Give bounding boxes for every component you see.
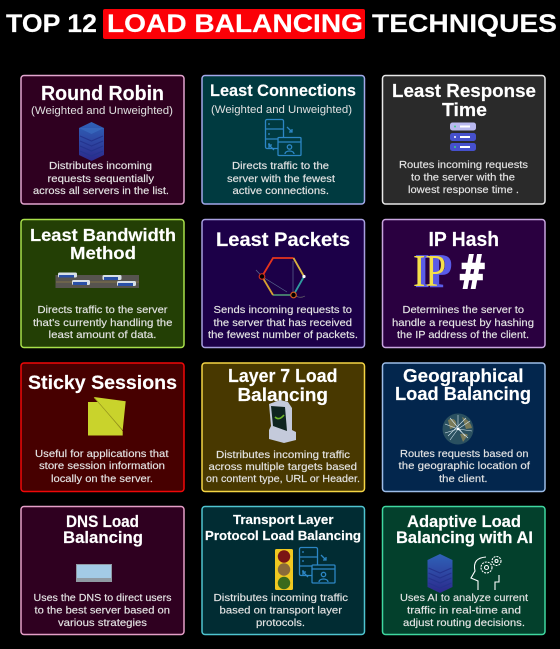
icon: hash symbol: #	[458, 245, 486, 299]
description	[208, 304, 358, 341]
heading: Geographical Load Balancing	[395, 365, 531, 404]
heading: Least Response Time	[392, 80, 536, 120]
icon: server stack	[450, 122, 476, 151]
heading: Least Response Time: Time	[442, 99, 487, 120]
description	[392, 304, 534, 341]
panel: DNS Load Balancing	[21, 506, 184, 634]
heading: Adaptive Load Balancing with AI: Adaptive Load	[407, 513, 521, 531]
heading: Geographical Load Balancing: Geographical	[403, 365, 524, 386]
description: to the best server based on	[34, 604, 170, 616]
description	[34, 592, 172, 629]
title: TECHNIQUES	[372, 10, 557, 38]
heading: Layer 7 Load Balancing: Layer 7 Load	[228, 365, 338, 386]
description: Determines the server to	[402, 304, 524, 316]
description: the IP address of the client.	[397, 329, 529, 341]
description: handle a request by hashing	[392, 317, 534, 329]
description: Routes incoming requests	[399, 159, 528, 171]
icon: server and user window	[300, 548, 335, 583]
heading: Transport Layer Protocol Load Balancing: Transport Layer	[233, 512, 334, 527]
subtitle: (Weighted and Unweighted)	[31, 105, 173, 117]
description: the client.	[439, 473, 488, 485]
heading: Least Bandwidth Method: Method	[70, 243, 136, 263]
description	[33, 160, 169, 197]
panel: Least Connections	[202, 76, 364, 204]
heading: IP Hash: IP Hash	[428, 229, 499, 251]
description: Distributes incoming traffic	[214, 592, 348, 604]
description	[399, 159, 528, 196]
heading: Transport Layer Protocol Load Balancing: Protocol Load Balancing	[205, 528, 361, 543]
title: TOP 12	[6, 10, 97, 38]
description: the geographic location of	[398, 460, 530, 472]
description: the server that has received	[214, 317, 352, 329]
description: least amount of data.	[48, 329, 156, 341]
description: across multiple targets based	[208, 461, 357, 473]
icon: IP letters: IP	[415, 245, 452, 298]
heading: DNS Load Balancing	[63, 513, 143, 547]
description	[35, 448, 169, 485]
description: various strategies	[58, 617, 147, 629]
description: server with the fewest	[227, 173, 335, 185]
panel: Sticky Sessions	[21, 363, 184, 492]
title	[6, 9, 557, 39]
description: the fewest number of packets.	[208, 329, 358, 341]
description: locally on the server.	[51, 473, 153, 485]
description: Distributes incoming traffic	[216, 449, 350, 461]
panel: Round Robin	[21, 76, 184, 204]
heading: Geographical Load Balancing: Load Balancing	[395, 383, 531, 404]
description: Directs traffic to the server	[38, 304, 168, 316]
description: on content type, URL or Header.	[206, 473, 360, 485]
icon: AI head with gears	[471, 556, 501, 590]
panel: Least Response Time	[382, 76, 545, 204]
icon: sticky notes	[88, 397, 126, 436]
description: Sends incoming requests to	[214, 304, 352, 316]
description	[398, 448, 530, 485]
panel: Least Bandwidth Method	[21, 220, 184, 348]
description	[214, 592, 348, 629]
icon: server tower	[79, 122, 104, 161]
icon: traffic light	[275, 549, 293, 590]
panel: Geographical Load Balancing	[382, 363, 545, 492]
icon: DNS device	[76, 564, 112, 582]
description	[400, 592, 528, 629]
description: Directs traffic to the	[232, 160, 329, 172]
heading: Least Bandwidth Method: Least Bandwidth	[30, 225, 176, 245]
description: Uses AI to analyze current	[400, 592, 528, 604]
description: Distributes incoming	[49, 160, 152, 172]
heading: Least Response Time: Least Response	[392, 80, 536, 101]
description: to the server with the	[411, 172, 515, 184]
icon: hexagon network	[256, 258, 306, 298]
description: requests sequentially	[48, 173, 155, 185]
panel: Transport Layer Protocol Load Balancing	[202, 506, 364, 634]
icon: server and user window	[266, 120, 301, 156]
heading: Least Bandwidth Method	[30, 225, 176, 263]
description: that's currently handling the	[33, 317, 173, 329]
description: adjust routing decisions.	[403, 617, 525, 629]
icon: computer terminal	[269, 400, 296, 443]
heading: Layer 7 Load Balancing	[228, 365, 338, 405]
heading: Least Connections: Least Connections	[210, 82, 356, 100]
panel: Least Packets	[202, 220, 364, 348]
heading: Layer 7 Load Balancing: Balancing	[238, 384, 328, 405]
subtitle: (Weighted and Unweighted)	[211, 104, 352, 116]
heading: DNS Load Balancing: Balancing	[63, 529, 143, 547]
icon: trains on track	[56, 272, 139, 288]
panel: Adaptive Load Balancing with AI	[382, 506, 545, 634]
description: Routes requests based on	[400, 448, 529, 460]
description: store session information	[39, 460, 165, 472]
panel: Layer 7 Load Balancing	[202, 363, 364, 492]
description	[206, 449, 360, 485]
description: active connections.	[232, 185, 329, 197]
heading: Transport Layer Protocol Load Balancing	[205, 512, 361, 543]
description: across all servers in the list.	[33, 185, 169, 197]
description: traffic in real-time and	[407, 604, 521, 616]
heading: Sticky Sessions: Sticky Sessions	[28, 372, 177, 394]
description: Uses the DNS to direct users	[34, 592, 172, 604]
heading: DNS Load Balancing: DNS Load	[66, 513, 139, 531]
heading: Adaptive Load Balancing with AI: Balancing with AI	[396, 529, 533, 547]
description: based on transport layer	[220, 604, 343, 616]
heading: Adaptive Load Balancing with AI	[396, 513, 533, 547]
icon: network globe	[442, 414, 474, 444]
panel: IP Hash	[382, 220, 545, 348]
heading: Round Robin: Round Robin	[41, 83, 164, 105]
icon: server tower	[428, 554, 452, 593]
description: protocols.	[256, 617, 305, 629]
description: Useful for applications that	[35, 448, 169, 460]
description: lowest response time .	[408, 184, 519, 196]
heading: Least Packets: Least Packets	[216, 229, 350, 251]
title: LOAD BALANCING	[107, 10, 363, 38]
icon: IP letters: IP	[413, 245, 446, 296]
description	[33, 304, 173, 341]
description	[227, 160, 335, 197]
